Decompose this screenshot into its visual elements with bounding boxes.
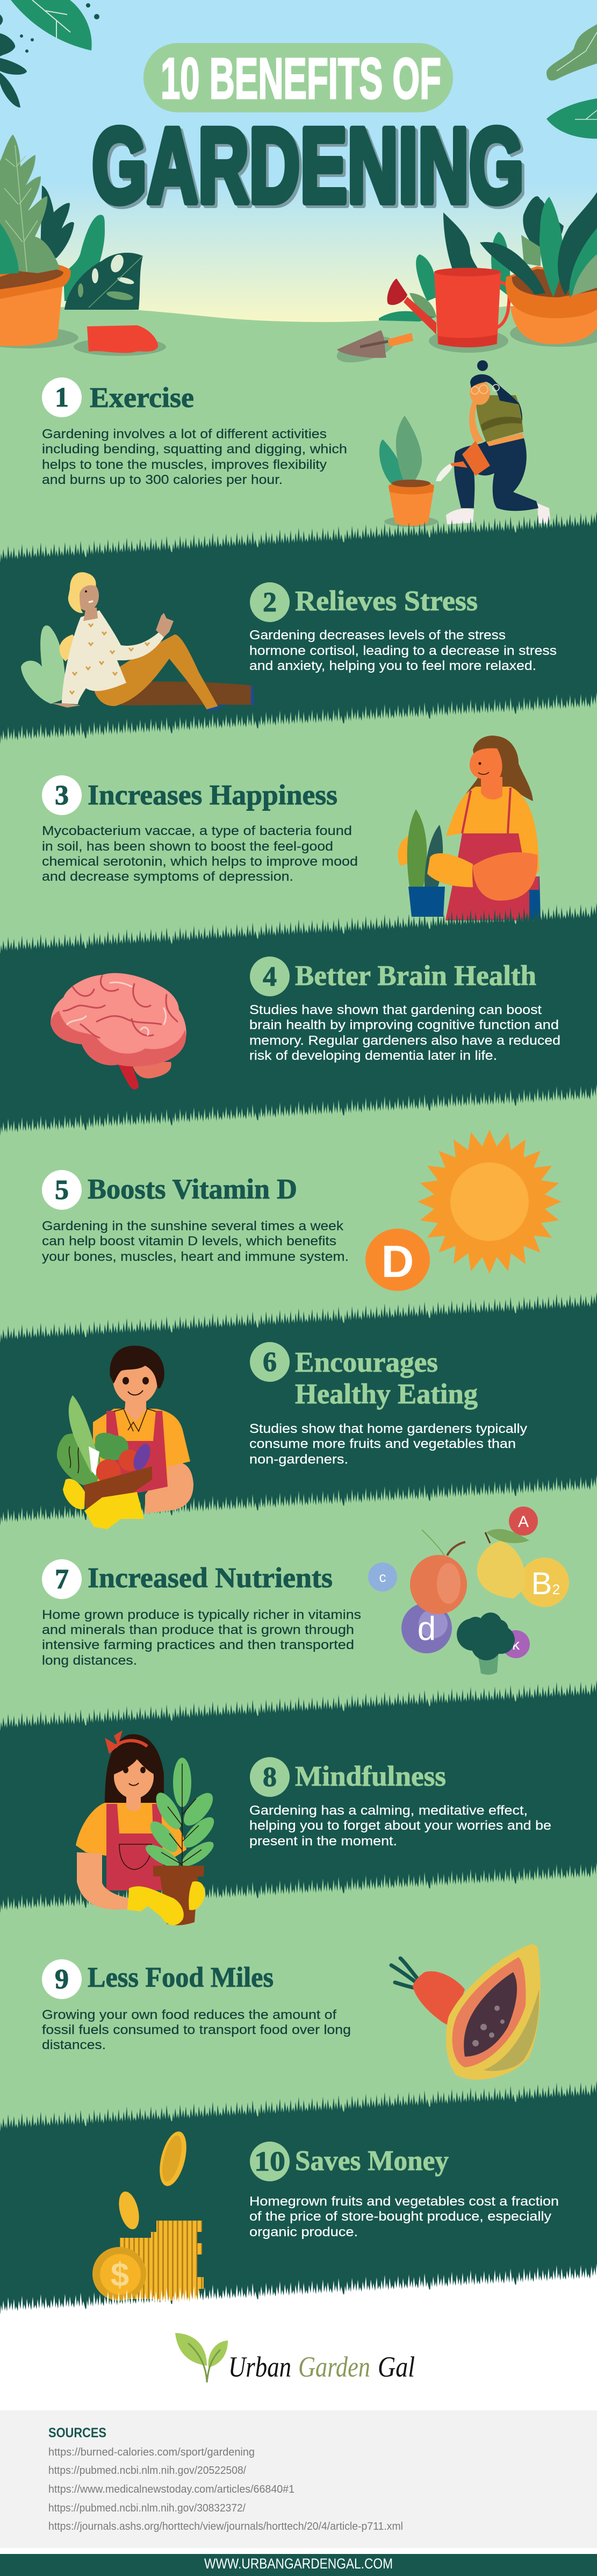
body text: intensive farming practices and then transported xyxy=(42,1638,354,1652)
vitamin B2: B xyxy=(531,1566,552,1601)
body text xyxy=(249,1803,551,1849)
illustration: brain xyxy=(51,973,186,1089)
right back leaves xyxy=(379,212,480,322)
body text xyxy=(42,427,347,487)
icon: broccoli xyxy=(457,1612,515,1675)
body text: fossil fuels consumed to transport food over long xyxy=(42,2023,351,2037)
heading: Better Brain Health: Better Brain Health xyxy=(295,960,536,991)
number badge 8: 8 xyxy=(263,1762,277,1793)
heading: Increases Happiness: Increases Happiness xyxy=(88,780,337,811)
sources list: https://www.medicalnewstoday.com/articles/66840#1 xyxy=(48,2484,294,2495)
vitamin C xyxy=(368,1562,397,1592)
illustration: relaxing woman xyxy=(21,572,254,711)
body text: Studies have shown that gardening can boost xyxy=(249,1003,542,1017)
grass band: light 5 xyxy=(0,1079,597,1345)
body text: Studies show that home gardeners typically xyxy=(249,1422,527,1436)
sources list: https://pubmed.ncbi.nlm.nih.gov/20522508/ xyxy=(48,2465,246,2477)
grass band: dark 8 xyxy=(0,1675,597,1916)
panel: 5 Boosts Vitamin D xyxy=(42,1129,562,1291)
body text xyxy=(42,1219,349,1264)
number badge 6 xyxy=(250,1342,290,1382)
number badge 4 xyxy=(250,957,290,996)
illustration: gold coins xyxy=(92,2129,204,2301)
panel: 4 Better Brain Health xyxy=(51,957,560,1089)
body text: Gardening has a calming, meditative effect, xyxy=(249,1803,528,1818)
sources list: https://pubmed.ncbi.nlm.nih.gov/30832372/ xyxy=(48,2502,246,2514)
illustration: sun xyxy=(417,1129,562,1274)
right plant back leaves xyxy=(491,196,564,297)
body text: Gardening decreases levels of the stress xyxy=(249,628,506,643)
panel: 9 Less Food Miles xyxy=(42,1944,541,2080)
illustration: woman holding plant xyxy=(76,1730,219,1925)
number badge 7 xyxy=(42,1559,82,1599)
heading: Encourages Healthy Eating: Encourages xyxy=(295,1347,438,1378)
number badge 1: 1 xyxy=(55,382,69,413)
illustration: carrot and papaya xyxy=(391,1944,541,2080)
illustration: man with vegetables xyxy=(57,1346,193,1529)
icon: vitamin D capsule: D xyxy=(382,1236,414,1287)
grass band: light 7 xyxy=(0,1469,597,1733)
body text: brain health by improving cognitive function and xyxy=(249,1018,559,1032)
number badge 4: 4 xyxy=(263,961,277,992)
left potted plant xyxy=(0,134,143,348)
body text: and burns up to 300 calories per hour. xyxy=(42,473,283,487)
body text: helps to tone the muscles, improves flexibility xyxy=(42,458,327,472)
body text: organic produce. xyxy=(249,2225,358,2239)
grass band: dark 2 xyxy=(0,506,597,747)
heading: Less Food Miles: Less Food Miles xyxy=(88,1962,274,1993)
body text xyxy=(249,628,557,673)
number badge 2 xyxy=(250,582,290,622)
body text: long distances. xyxy=(42,1653,137,1668)
footer bar: WWW.URBANGARDENGAL.COM xyxy=(204,2556,393,2572)
panel: 10 Saves Money xyxy=(92,2129,559,2301)
body text: including bending, squatting and digging, which xyxy=(42,442,347,456)
vitamin B2 xyxy=(520,1558,569,1607)
heading: Saves Money: Saves Money xyxy=(295,2145,449,2177)
panel: 7 Increased Nutrients xyxy=(42,1507,569,1675)
vitamin A: A xyxy=(518,1513,529,1531)
footer bar xyxy=(0,2554,597,2576)
grass band: dark 4 xyxy=(0,897,597,1138)
body text: chemical serotonin, which helps to improve mood xyxy=(42,854,358,869)
body text: distances. xyxy=(42,2038,106,2052)
sky background xyxy=(0,0,597,323)
logo: Urban Garden Gal xyxy=(175,2333,415,2383)
body text: risk of developing dementia later in life. xyxy=(249,1048,497,1063)
sources heading: SOURCES xyxy=(48,2425,106,2441)
body text: and anxiety, helping you to feel more relaxed. xyxy=(249,659,536,673)
body text xyxy=(249,1422,527,1467)
number badge 9: 9 xyxy=(55,1964,69,1995)
body text: hormone cortisol, leading to a decrease in stress xyxy=(249,644,557,658)
number badge 6: 6 xyxy=(263,1347,277,1378)
body text xyxy=(42,1608,361,1668)
illustration: gold coins: $ xyxy=(111,2257,129,2294)
body text xyxy=(249,1003,560,1063)
number badge 10 xyxy=(250,2142,290,2181)
vitamin D xyxy=(401,1603,452,1653)
panel: 6 Encourages Healthy Eating xyxy=(57,1342,527,1529)
body text: consume more fruits and vegetables than xyxy=(249,1437,516,1451)
vitamin C: c xyxy=(379,1569,386,1585)
body text: helping you to forget about your worries and be xyxy=(249,1818,551,1833)
sources list: https://journals.ashs.org/horttech/view/journals/horttech/20/4/article-p711.xml xyxy=(48,2521,403,2532)
body text: and minerals than produce that is grown through xyxy=(42,1623,354,1637)
vitamin D: d xyxy=(418,1610,436,1647)
grass band: dark 10 xyxy=(0,2075,597,2316)
number badge 3 xyxy=(42,775,82,815)
number badge 5 xyxy=(42,1170,82,1210)
vitamin A xyxy=(509,1507,538,1536)
heading: Encourages Healthy Eating: Healthy Eating xyxy=(295,1379,478,1410)
body text: non-gardeners. xyxy=(249,1452,348,1467)
sources list xyxy=(48,2446,403,2532)
sources list: https://burned-calories.com/sport/gardening xyxy=(48,2446,255,2458)
icon: sprout xyxy=(175,2333,228,2382)
grass band: dark 6 xyxy=(0,1287,597,1528)
vitamin K: k xyxy=(512,1636,520,1653)
illustration: vitamins and fruit xyxy=(368,1507,569,1675)
heading: Boosts Vitamin D: Boosts Vitamin D xyxy=(88,1174,297,1205)
heading: Exercise: Exercise xyxy=(90,382,194,413)
body text: your bones, muscles, heart and immune system. xyxy=(42,1250,349,1264)
panel: 8 Mindfulness xyxy=(76,1730,551,1925)
heading: Relieves Stress: Relieves Stress xyxy=(295,586,478,617)
number badge 7: 7 xyxy=(55,1564,69,1595)
heading: Encourages Healthy Eating xyxy=(295,1347,478,1410)
number badge 8 xyxy=(250,1757,290,1797)
wordmark: Garden xyxy=(298,2351,370,2383)
grass band: white footer xyxy=(0,2258,597,2464)
panel: 3 Increases Happiness xyxy=(42,736,541,920)
vitamin K xyxy=(502,1630,530,1658)
body text: Home grown produce is typically richer in vitamins xyxy=(42,1608,361,1622)
body text: Gardening involves a lot of different activities xyxy=(42,427,327,441)
right potted plant xyxy=(480,192,597,347)
heading: Increased Nutrients: Increased Nutrients xyxy=(88,1562,333,1594)
number badge 9 xyxy=(42,1959,82,1999)
grass band: light 3 xyxy=(0,687,597,956)
body text xyxy=(249,2194,559,2239)
body text: present in the moment. xyxy=(249,1834,397,1849)
wordmark xyxy=(228,2351,415,2383)
body text: Mycobacterium vaccae, a type of bacteria found xyxy=(42,824,352,838)
wordmark: Urban xyxy=(228,2351,291,2383)
sources panel xyxy=(0,2410,597,2548)
trowel xyxy=(334,330,413,368)
icon: vitamin D capsule xyxy=(365,1229,430,1291)
number badge 5: 5 xyxy=(55,1175,69,1205)
body text xyxy=(42,824,358,884)
body text: memory. Regular gardeners also have a reduced xyxy=(249,1033,560,1048)
number badge 10: 10 xyxy=(254,2146,285,2177)
icon: lemon xyxy=(477,1529,529,1599)
title pill xyxy=(143,43,453,112)
wordmark: Gal xyxy=(378,2351,415,2383)
panel: 1 Exercise xyxy=(42,360,550,527)
number badge 1 xyxy=(42,377,82,417)
number badge 3: 3 xyxy=(55,780,69,811)
number badge 2: 2 xyxy=(263,587,277,618)
top left foliage xyxy=(0,0,99,108)
body text: Homegrown fruits and vegetables cost a fraction xyxy=(249,2194,559,2209)
illustration: woman watering plant xyxy=(379,360,550,527)
body text: Growing your own food reduces the amount of xyxy=(42,2008,336,2022)
body text: of the price of store-bought produce, especially xyxy=(249,2209,551,2224)
panel: 2 Relieves Stress xyxy=(21,572,557,711)
body text xyxy=(42,2008,351,2052)
red watering can xyxy=(387,268,509,353)
top right foliage xyxy=(546,24,597,139)
icon: peach xyxy=(410,1530,467,1614)
body text: in soil, has been shown to boost the feel-good xyxy=(42,839,333,854)
red gardening glove xyxy=(74,325,166,356)
heading: Mindfulness: Mindfulness xyxy=(295,1761,446,1792)
body text: and decrease symptoms of depression. xyxy=(42,869,293,884)
illustration: woman with potted plant xyxy=(398,736,541,920)
vitamin B2: 2 xyxy=(552,1581,560,1597)
ground hill xyxy=(0,301,597,591)
grass band: light 9 xyxy=(0,1857,597,2133)
body text: Gardening in the sunshine several times a week xyxy=(42,1219,344,1233)
body text: can help boost vitamin D levels, which benefits xyxy=(42,1234,336,1248)
